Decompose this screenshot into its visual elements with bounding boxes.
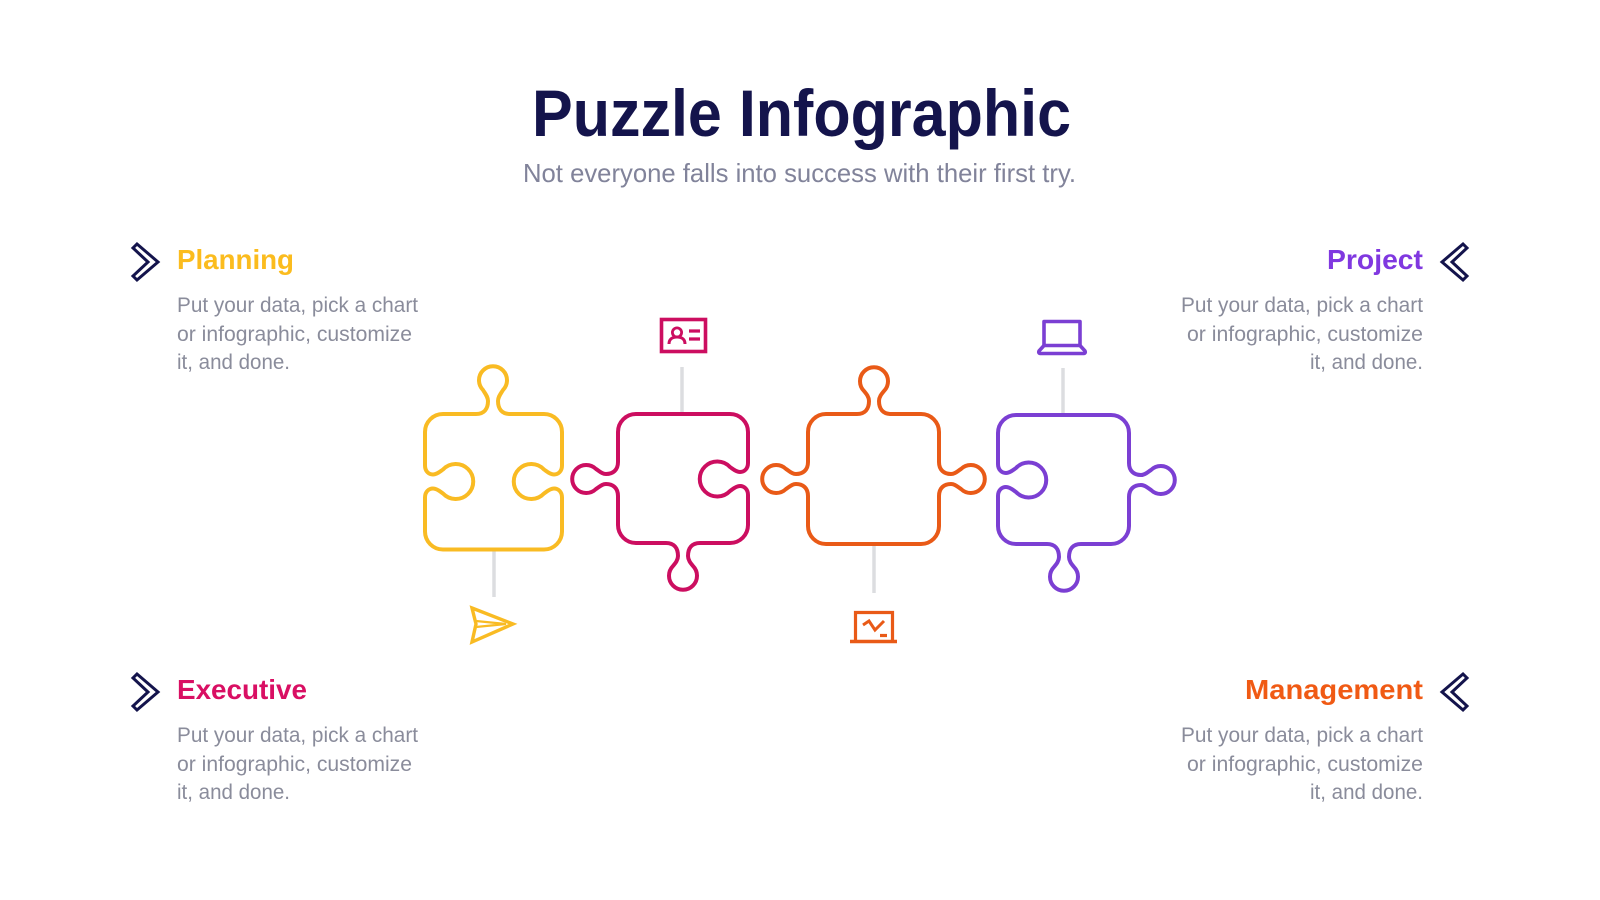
text: management body: [1181, 724, 1423, 804]
text: project body: it, and done.: [1310, 351, 1423, 374]
icon: laptop: [1039, 322, 1085, 354]
text: management body: it, and done.: [1310, 781, 1423, 804]
text: project body: [1181, 294, 1423, 374]
panel: planning: [133, 244, 418, 374]
connector: orange to chart: [872, 546, 876, 593]
text: executive body: Put your data, pick a chart: [177, 724, 418, 747]
subtitle: Not everyone falls into success with their first try.: [523, 158, 1076, 188]
text: executive body: it, and done.: [177, 781, 290, 804]
text: executive body: or infographic, customize: [177, 753, 412, 776]
panel: project: [1181, 244, 1467, 374]
connector: pink to id card: [680, 367, 684, 412]
text: project body: Put your data, pick a chart: [1181, 294, 1423, 317]
text: planning body: it, and done.: [177, 351, 290, 374]
panel: management: [1181, 674, 1467, 804]
title: Puzzle Infographic: [532, 76, 1071, 150]
text: planning body: [177, 294, 418, 374]
puzzle piece: purple: [998, 415, 1175, 591]
heading: project: Project: [1327, 244, 1423, 275]
text: management body: Put your data, pick a chart: [1181, 724, 1423, 747]
icon: management chevron: [1442, 674, 1467, 710]
connector: purple to laptop: [1061, 368, 1065, 413]
panel: executive: [133, 674, 418, 804]
text: planning body: Put your data, pick a chart: [177, 294, 418, 317]
heading: management: Management: [1245, 674, 1423, 705]
icon: paper plane: [472, 608, 513, 642]
text: project body: or infographic, customize: [1187, 323, 1423, 346]
icon: project chevron: [1442, 244, 1467, 280]
heading: executive: Executive: [177, 674, 307, 705]
icon: executive chevron: [133, 674, 158, 710]
puzzle piece: orange: [762, 367, 985, 544]
icon: planning chevron: [133, 244, 158, 280]
connector: yellow to plane: [492, 551, 496, 597]
text: planning body: or infographic, customize: [177, 323, 412, 346]
icon: id card: [662, 320, 706, 352]
text: management body: or infographic, customize: [1187, 753, 1423, 776]
heading: planning: Planning: [177, 244, 294, 275]
puzzle piece: pink: [572, 414, 748, 590]
puzzle piece: yellow: [425, 366, 562, 550]
icon: chart screen: [850, 612, 897, 642]
text: executive body: [177, 724, 418, 804]
